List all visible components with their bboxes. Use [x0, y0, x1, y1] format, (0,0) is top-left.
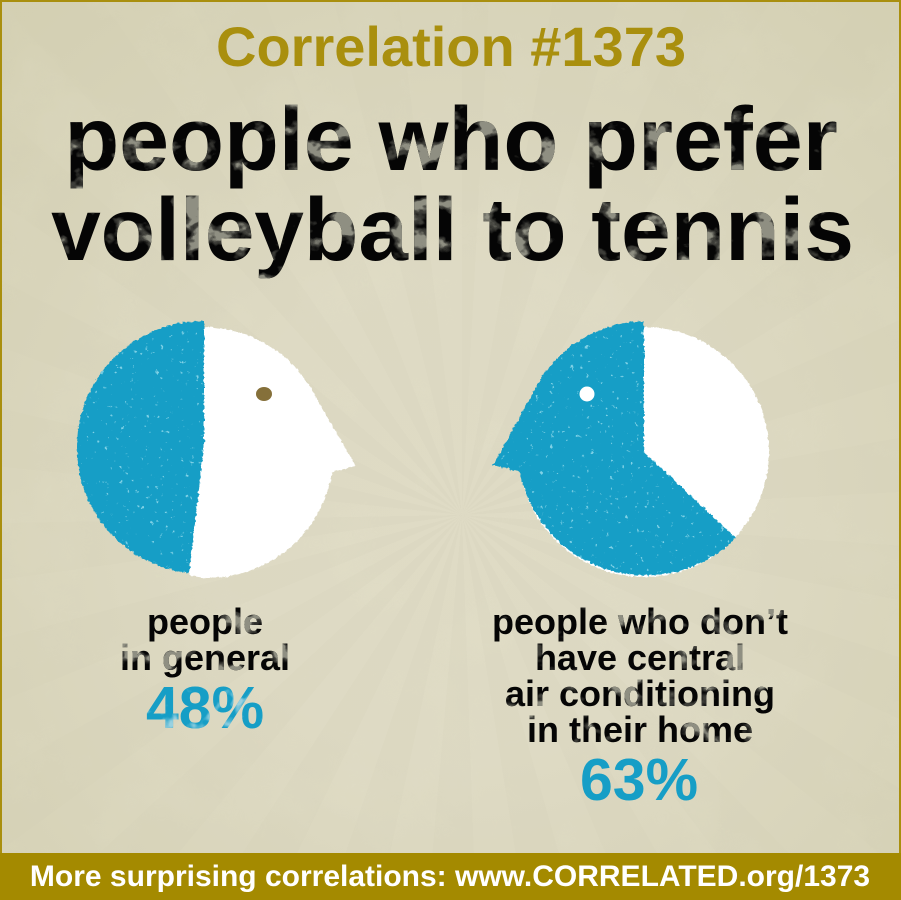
label: people in general: in general — [120, 637, 290, 678]
eye — [580, 386, 594, 402]
label: people who don't have central air: have central — [535, 637, 745, 678]
white share — [519, 327, 769, 577]
label: people who don't have central air: air conditioning — [505, 673, 775, 714]
footer link text: More surprising correlations: www.CORRELATED.org/1373 — [30, 860, 870, 893]
label: people in general — [120, 601, 290, 678]
pie chart head: people in general 48% — [77, 321, 356, 578]
main title — [51, 90, 854, 279]
label: people in general: people — [147, 601, 263, 642]
white share with beak — [189, 327, 356, 578]
label: people who don't have central air: in their home — [527, 709, 753, 750]
label: people who don't have central air: people who don’t — [492, 601, 788, 642]
footer band — [0, 853, 901, 900]
blue share 63% with beak — [493, 321, 736, 575]
subtitle: correlation number: Correlation #1373 — [216, 15, 686, 78]
value: 63%: 63% — [580, 747, 698, 813]
main title: volleyball to tennis — [51, 179, 854, 279]
eye — [256, 387, 272, 401]
label: people who don't have central air — [492, 601, 788, 750]
main title: people who prefer — [64, 90, 838, 190]
blue share 48% — [77, 321, 204, 573]
pie chart head: no central air 63% — [493, 321, 769, 577]
value: 48%: 48% — [146, 675, 264, 741]
